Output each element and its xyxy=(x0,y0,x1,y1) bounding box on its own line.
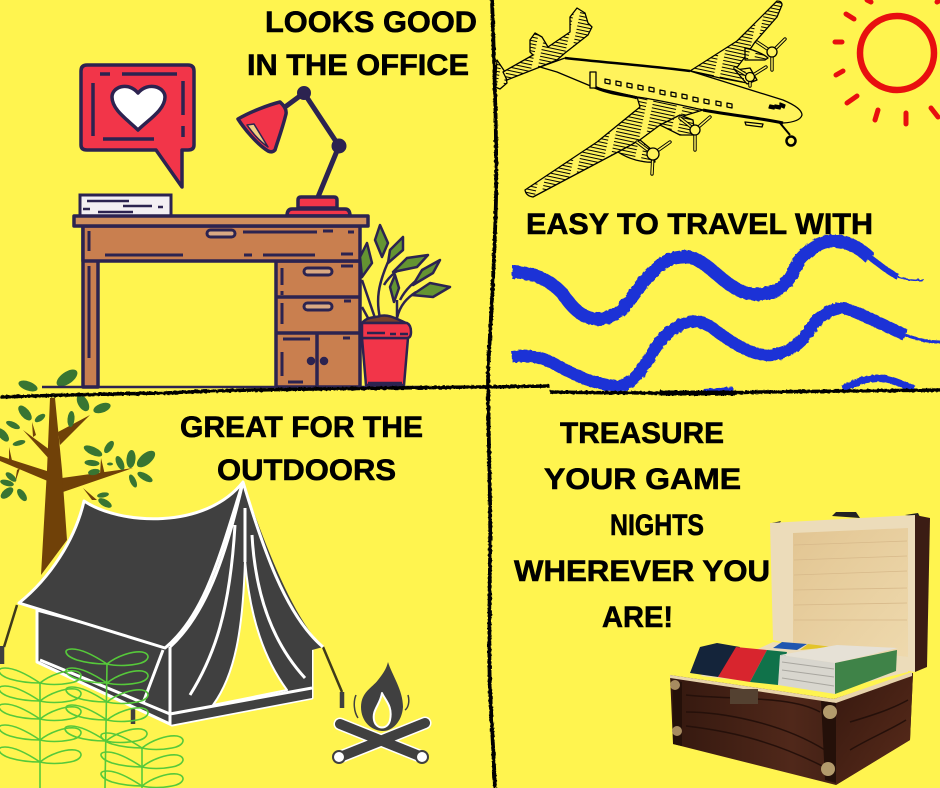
floor line xyxy=(42,386,420,388)
icon: heart speech bubble xyxy=(81,65,194,187)
icon: tent xyxy=(2,482,342,725)
icon: tree xyxy=(0,366,158,575)
icon: airplane xyxy=(495,1,802,197)
heading: office: LOOKS GOOD xyxy=(265,6,477,39)
heading: treasure: ARE! xyxy=(602,601,673,634)
panel: outdoors xyxy=(0,366,428,788)
heading: outdoors: OUTDOORS xyxy=(217,454,396,487)
heading: outdoors xyxy=(180,411,423,487)
icon: red sun xyxy=(835,0,940,124)
icon: books xyxy=(80,195,171,216)
panel: treasure chest xyxy=(670,512,930,785)
icon: campfire xyxy=(333,662,428,763)
icon: chest base xyxy=(670,672,913,785)
heading: office xyxy=(247,6,477,82)
heading: treasure: YOUR GAME xyxy=(544,463,741,496)
heading: treasure: NIGHTS xyxy=(610,509,704,542)
icon: open lid xyxy=(770,512,930,672)
icon: desk lamp xyxy=(238,86,350,216)
heading: outdoors: GREAT FOR THE xyxy=(180,411,423,444)
icon: green ferns xyxy=(0,649,183,788)
panel: travel xyxy=(495,0,940,391)
panel: office xyxy=(74,65,450,387)
heading: office: IN THE OFFICE xyxy=(247,49,469,82)
heading: treasure xyxy=(514,417,770,634)
icon: potted plant xyxy=(360,225,450,385)
heading: travel: EASY TO TRAVEL WITH xyxy=(526,208,873,241)
icon: desk xyxy=(74,216,368,387)
heading: treasure: WHEREVER YOU xyxy=(514,555,770,588)
heading: treasure: TREASURE xyxy=(560,417,724,450)
icon: blue waves xyxy=(512,241,940,391)
icon: game chips and cards xyxy=(690,642,908,694)
